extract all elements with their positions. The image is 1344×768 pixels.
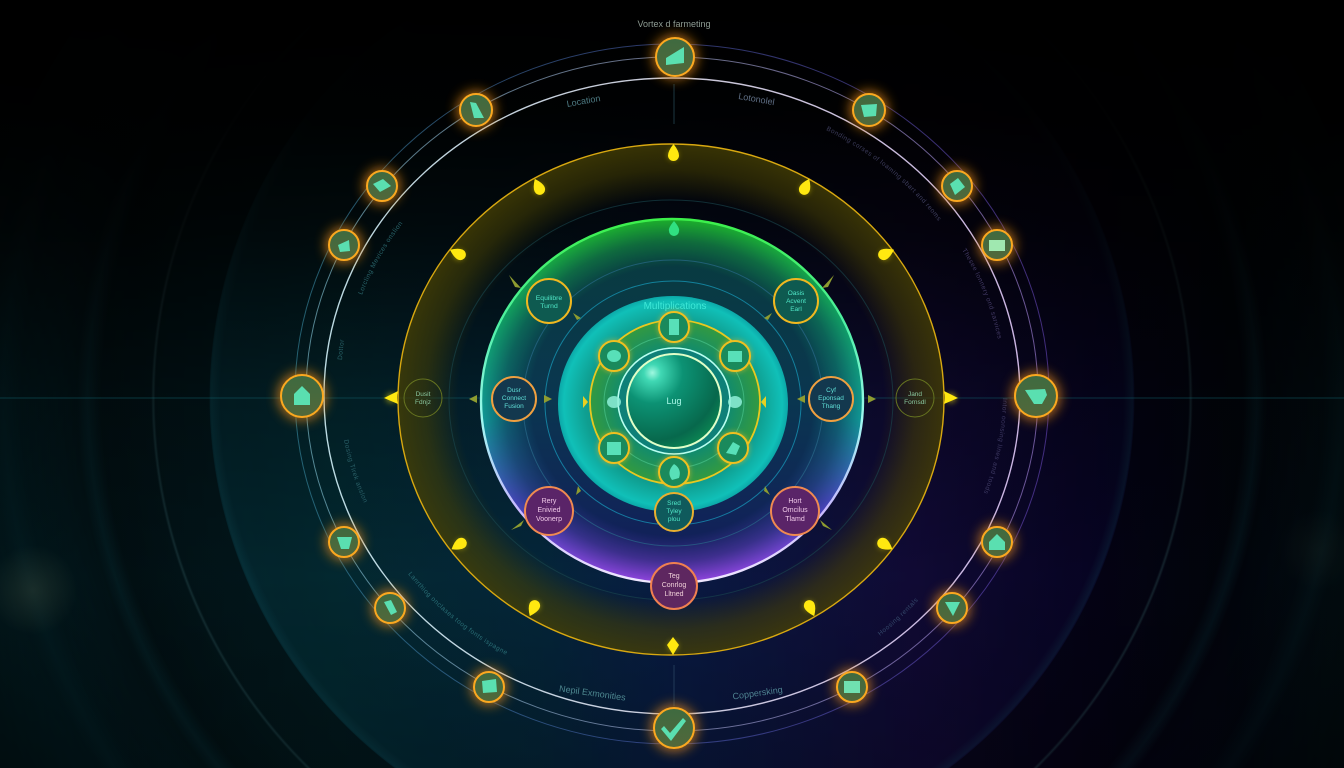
central sphere: Lug (666, 396, 682, 406)
outer orbit rings (295, 44, 1049, 744)
node: left: Fusion (504, 403, 524, 410)
node: right (809, 377, 853, 421)
olive arrow markers (469, 275, 876, 530)
node: left: Dusr (507, 387, 522, 394)
faint arc captions: Lanrthiog onclases toog fonts ispagne (408, 572, 507, 654)
outer yellow ring (398, 144, 944, 655)
node: upper right: Oasis (788, 290, 805, 297)
central sphere (627, 354, 721, 448)
far side nodes (404, 379, 934, 417)
far side node text: Jand (908, 391, 922, 398)
teal core disc (558, 296, 788, 512)
faint arc captions (338, 126, 1008, 654)
node: upper right (774, 279, 818, 323)
yellow droplet markers (384, 144, 958, 655)
node: lower right: Omcilus (782, 507, 808, 514)
inner ring icon nodes (598, 311, 751, 488)
node: upper left (527, 279, 571, 323)
faint arc captions: Bonding corses of loaming sbart and reoms (826, 126, 940, 220)
outer orbit icon nodes (278, 35, 1060, 751)
node: lower center: Tyley (666, 508, 682, 515)
node: upper left: Turnd (540, 303, 558, 310)
node: lower left: Rery (542, 498, 557, 505)
label: location: Location (566, 93, 601, 109)
label: bottom left: Nepil Exmonities (559, 683, 627, 703)
node icons (294, 47, 1047, 741)
node: bottom: Conrlog (662, 582, 686, 589)
node: right: Thang (822, 403, 841, 410)
node: lower right: Tlamd (785, 516, 805, 523)
node: bottom (651, 563, 697, 609)
node: lower left: Enivied (538, 507, 561, 514)
node: left: Connect (502, 395, 526, 402)
far side node text: Fornsdl (904, 399, 926, 406)
node: lower center: plou (668, 516, 681, 523)
node discs (281, 38, 1057, 748)
faint arc captions: Dosing Tirek anslon (344, 440, 367, 502)
label: lotonolel: Lotonolel (738, 91, 775, 107)
node: lower left: Voonerp (536, 516, 562, 523)
faint arc captions: Intor oonsing lines and toods (984, 398, 1008, 494)
node: upper left: Equilibre (536, 295, 562, 302)
node: right: Cyf (826, 387, 836, 394)
node: upper right: Earl (790, 306, 802, 313)
faint arc captions: Thesee lonnery ond sarvices (963, 248, 1001, 338)
far side node text (415, 391, 926, 406)
mid ring nodes (492, 279, 853, 609)
node: bottom: Teg (668, 573, 680, 580)
far side node text: Dusit (416, 391, 431, 398)
node: upper right: Acvent (786, 298, 806, 305)
faint arc captions: Dottor (338, 340, 344, 360)
node: right: Eponsad (818, 395, 844, 402)
faint arc captions: Lorcling Mevices onslion (358, 222, 402, 294)
green-to-purple ring (481, 219, 863, 583)
node: lower right (771, 487, 819, 535)
green droplet marker (669, 221, 679, 236)
node: left (492, 377, 536, 421)
faint arc captions: Hoosing rentals (878, 598, 918, 636)
node: lower right: Hort (788, 498, 802, 505)
node: lower center (655, 493, 693, 531)
node: lower center: Sred (667, 500, 681, 507)
label: bottom right: Coppersking (732, 685, 783, 701)
far side node text: Fdnjz (415, 399, 431, 406)
node: lower left (525, 487, 573, 535)
heading: inner disc: Multiplications (644, 301, 706, 312)
node: bottom: Lltned (664, 591, 684, 598)
node glow (278, 35, 1060, 751)
top label: Vortex d farmeting (637, 19, 711, 29)
